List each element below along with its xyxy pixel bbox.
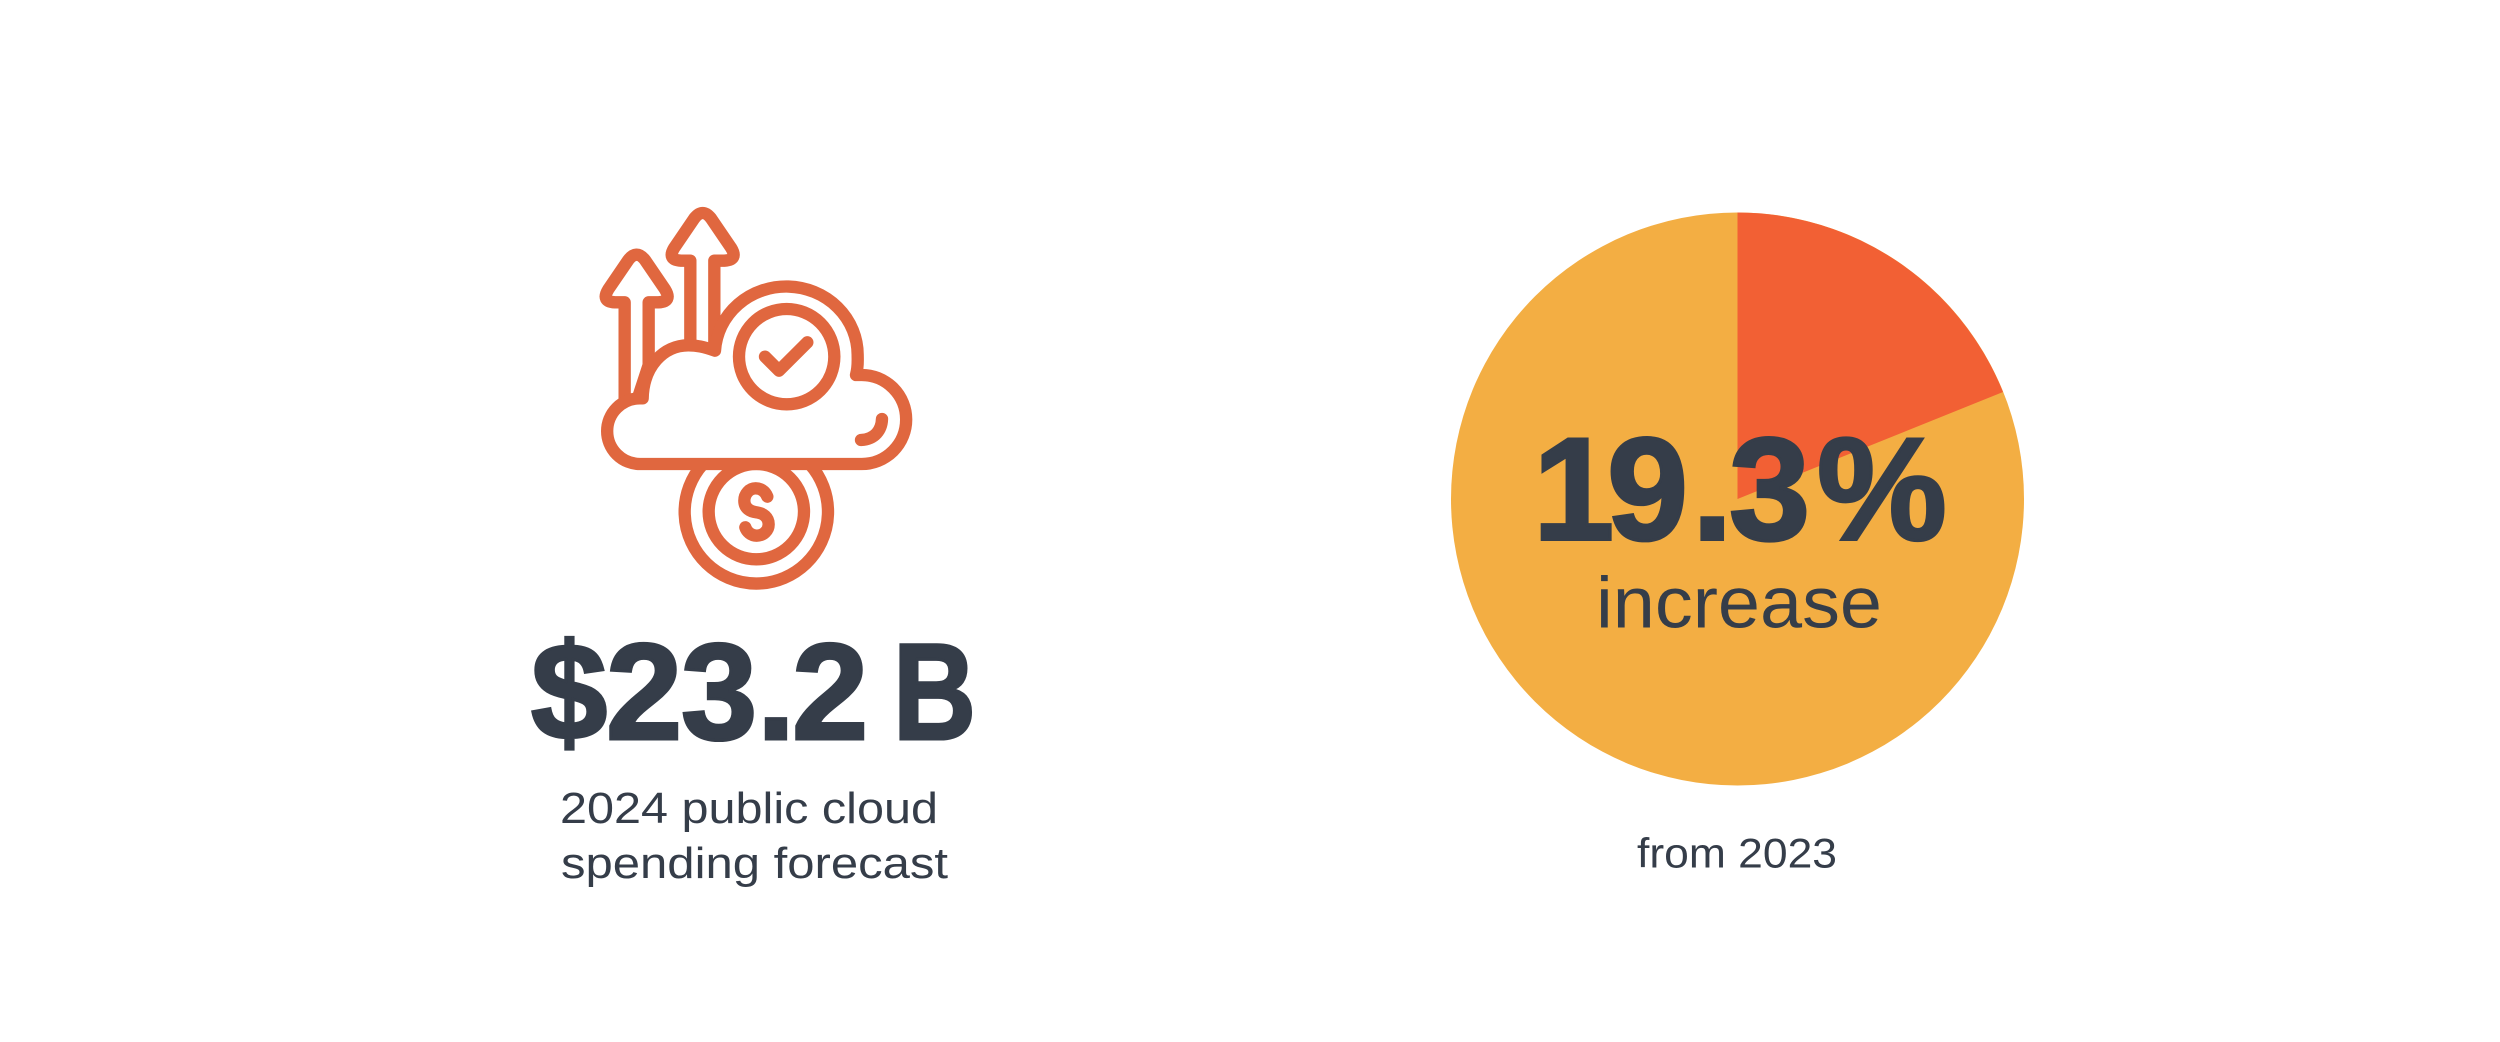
caption: 2024 public cloud spending forecast: spending forecast — [561, 839, 948, 888]
icon: cloud with rising arrows, check mark and dollar coin — [606, 213, 906, 584]
icon part: left arrow — [606, 255, 668, 398]
icon part: cloud highlight — [861, 419, 882, 440]
icon part: right arrow — [672, 213, 734, 350]
caption: 2024 public cloud spending forecast: 2024 public cloud — [560, 784, 938, 833]
icon part: inner coin — [709, 464, 804, 559]
big number: 19.3%: 19.3% — [1533, 408, 1947, 570]
icon part: cloud — [607, 287, 906, 464]
panel: pie chart of increase — [1451, 212, 2024, 877]
panel: spending forecast — [531, 213, 976, 888]
big number: $23.2 B: $23.2 — [531, 616, 868, 769]
pie chart — [1451, 212, 2024, 786]
note: from 2023: from 2023 — [1637, 830, 1837, 877]
caption: 2024 public cloud spending forecast — [560, 784, 948, 888]
icon part: outer coin — [685, 464, 828, 584]
label: increase: increase — [1596, 564, 1882, 644]
icon part: check circle — [739, 309, 834, 404]
icon part: check mark — [765, 342, 807, 371]
icon part: dollar sign — [744, 488, 769, 536]
big number: $23.2 B: B — [893, 616, 976, 769]
